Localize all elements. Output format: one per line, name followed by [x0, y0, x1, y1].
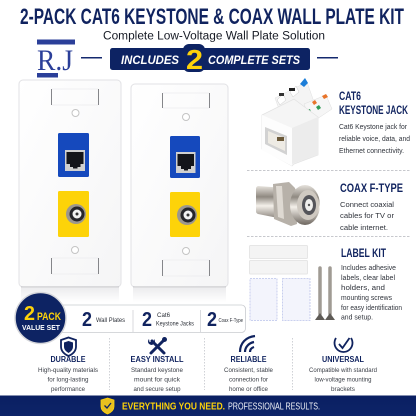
stats bar: Wall Plates — [96, 318, 125, 324]
stats bar: 2 — [142, 309, 152, 331]
feature: easy install: mount for quick — [134, 376, 181, 384]
yellow keystone with coax port — [58, 191, 89, 237]
icon: shield — [61, 338, 76, 356]
wall plate 1 — [19, 80, 121, 287]
feature: universal: UNIVERSAL — [322, 355, 364, 364]
panel: label kit text — [341, 248, 402, 322]
blue keystone with RJ45 port — [58, 133, 89, 177]
feature: easy install: EASY INSTALL — [130, 355, 184, 364]
panel: coax f-type text: cable internet. — [340, 225, 388, 232]
footer band: PROFESSIONAL RESULTS. — [228, 402, 320, 412]
icon: yellow shield — [101, 398, 114, 414]
feature: durable: performance — [51, 386, 85, 393]
feature: reliable — [224, 336, 273, 393]
panel: cat6 keystone jack text: reliable voice, data, and — [339, 136, 410, 143]
panel: label kit text: mounting screws — [341, 295, 392, 302]
panel: coax f-type text — [340, 183, 403, 232]
feature: universal: low-voltage mounting — [314, 376, 372, 384]
feature: durable: DURABLE — [50, 355, 86, 364]
photo: keystone jack — [262, 78, 332, 166]
stats bar: Coax F-Type — [218, 318, 243, 324]
photo: label kit parts — [250, 246, 335, 320]
banner: includes 2 complete sets — [81, 44, 338, 75]
plate reflections — [21, 288, 226, 302]
badge: 2 pack value set: VALUE SET — [22, 323, 60, 332]
footer band — [0, 396, 416, 416]
panel: label kit text: labels, clear label — [341, 275, 395, 282]
icon: signal arcs — [240, 336, 255, 352]
panel: label kit text: LABEL KIT — [341, 248, 386, 260]
panel: label kit text: and setup. — [341, 314, 373, 322]
stats bar: Cat6 — [157, 313, 171, 319]
photo: coax F-type coupler — [256, 182, 320, 226]
feature: reliable: RELIABLE — [230, 355, 267, 364]
badge: 2 pack value set: PACK — [37, 311, 61, 323]
panel: label kit text: holders, and — [341, 285, 385, 292]
feature: reliable: Consistent, stable — [224, 367, 273, 374]
feature: universal — [309, 338, 377, 393]
badge: 2 pack value set: 2 — [24, 303, 35, 325]
panel: cat6 keystone jack text: CAT6 — [339, 91, 361, 103]
panel: coax f-type text: cables for TV or — [340, 213, 395, 220]
panel: coax f-type text: Connect coaxial — [340, 202, 394, 209]
stats bar: 2 — [207, 309, 217, 331]
feature: easy install — [130, 337, 184, 393]
panel: coax f-type text: COAX F-TYPE — [340, 183, 403, 195]
badge: 2 pack value set — [15, 292, 66, 344]
footer band: EVERYTHING YOU NEED. — [122, 402, 225, 412]
panel: label kit text: Includes adhesive — [341, 265, 396, 272]
yellow keystone with coax port — [170, 192, 200, 237]
panel: cat6 keystone jack text — [339, 91, 410, 155]
feature: reliable: home or office — [229, 386, 268, 393]
panel: label kit text: for easy identification — [341, 305, 402, 312]
feature: universal: Compatible with standard — [309, 367, 377, 374]
feature: universal: brackets — [331, 386, 355, 393]
logo: R.J: R.J — [37, 44, 73, 77]
panel: cat6 keystone jack text: Ethernet connectivity. — [339, 148, 404, 155]
stats bar: 2 — [82, 309, 92, 331]
feature: easy install: and secure setup — [134, 386, 181, 393]
stats bar: Keystone Jacks — [156, 322, 194, 328]
icon: tools — [148, 337, 167, 353]
banner: includes 2 complete sets: COMPLETE SETS — [208, 53, 300, 67]
feature: reliable: connection for — [229, 376, 268, 384]
feature: durable — [38, 338, 98, 393]
panel: cat6 keystone jack text: Cat6 Keystone jack for — [339, 124, 408, 131]
feature: easy install: Standard keystone — [131, 367, 183, 374]
banner: includes 2 complete sets: 2 — [186, 44, 203, 75]
stats bar — [55, 305, 246, 332]
feature: durable: High-quality materials — [38, 367, 98, 374]
blue keystone with RJ45 port — [170, 136, 200, 178]
banner: includes 2 complete sets: INCLUDES — [121, 53, 179, 67]
wall plate 2 — [131, 84, 228, 287]
icon: check circle — [334, 338, 352, 352]
feature: durable: for long-lasting — [48, 376, 89, 384]
subtitle: Complete Low-Voltage Wall Plate Solution — [103, 30, 325, 42]
